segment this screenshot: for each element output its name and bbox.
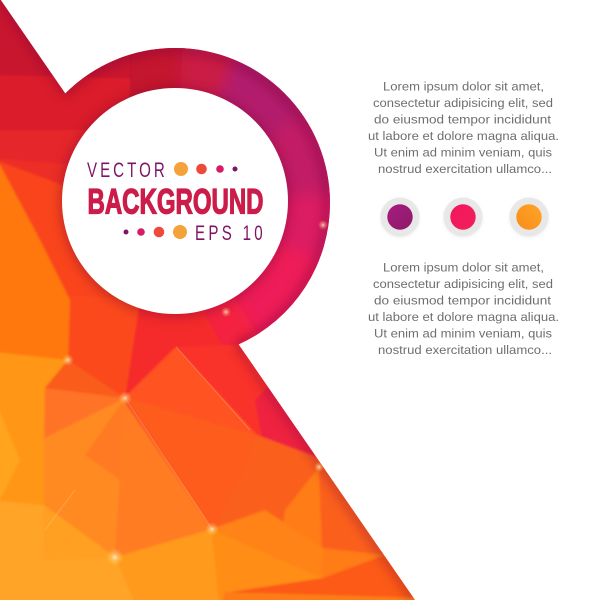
- text block: bottom: consectetur adipisicing elit, sed: [373, 277, 553, 291]
- ring wedges: [1, 0, 330, 404]
- text block: bottom: nostrud exercitation ullamco...: [378, 343, 552, 357]
- text block: bottom: [368, 260, 559, 357]
- text block: top: ut labore et dolore magna aliqua.: [368, 129, 559, 143]
- text block: bottom: Lorem ipsum dolor sit amet,: [383, 260, 544, 274]
- upper-left red polygons: [0, 0, 222, 398]
- top dots: [174, 162, 238, 176]
- word: EPS 10: EPS 10: [195, 220, 263, 245]
- text block: top: Ut enim ad minim veniam, quis: [374, 146, 552, 160]
- text block: bottom: Ut enim ad minim veniam, quis: [374, 326, 552, 340]
- edge shading: [0, 0, 415, 600]
- solid backing: [0, 0, 415, 600]
- white circle: [62, 88, 288, 314]
- button: purple: [380, 198, 420, 238]
- button: orange: [510, 198, 548, 238]
- text block: top: [368, 80, 559, 176]
- bottom dots: [124, 225, 187, 239]
- word: VECTOR: VECTOR: [87, 157, 165, 182]
- text block: top: Lorem ipsum dolor sit amet,: [383, 80, 544, 94]
- centre polygons: [44, 345, 430, 600]
- left orange polygons: [0, 165, 138, 600]
- text block: bottom: do eiusmod tempor incididunt: [374, 294, 552, 308]
- colour buttons: [380, 198, 548, 238]
- logo: vector background eps 10: [87, 157, 264, 245]
- text block: bottom: ut labore et dolore magna aliqua.: [368, 310, 559, 324]
- inner shadow of white circle: [60, 87, 290, 317]
- polygon background with ring: [0, 0, 415, 600]
- text block: top: nostrud exercitation ullamco...: [378, 162, 552, 176]
- sparkles: [45, 220, 328, 566]
- button: pink: [444, 198, 482, 238]
- word: BACKGROUND: BACKGROUND: [88, 182, 264, 222]
- text block: top: do eiusmod tempor incididunt: [374, 112, 552, 126]
- text block: top: consectetur adipisicing elit, sed: [373, 96, 553, 110]
